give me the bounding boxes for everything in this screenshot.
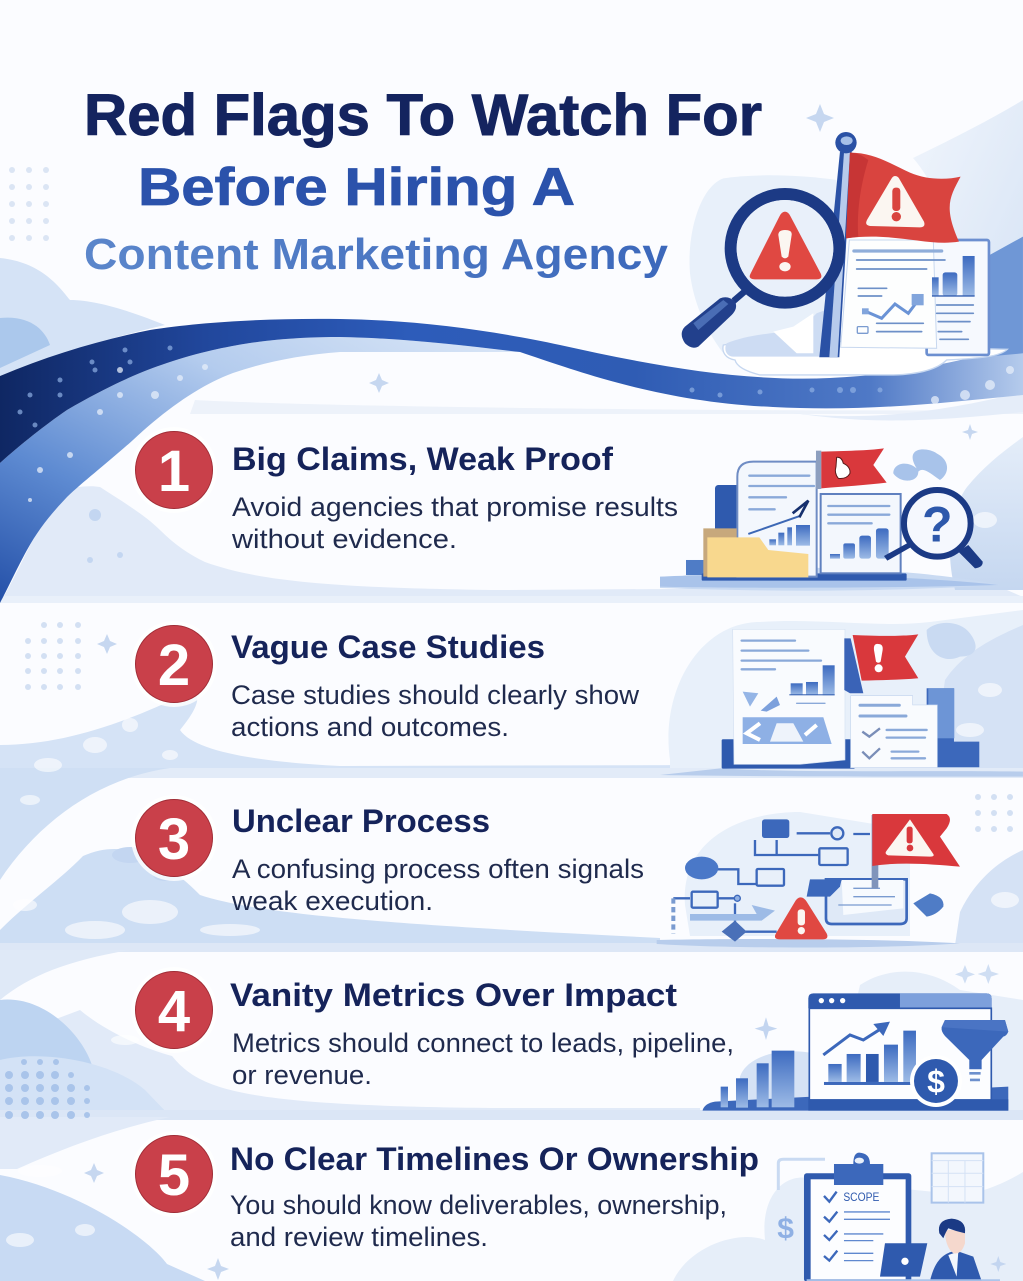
item 2	[131, 621, 1023, 777]
heading 5: No Clear Timelines Or Ownership	[230, 1141, 759, 1177]
decorative wave band	[0, 319, 1023, 603]
heading 4: Vanity Metrics Over Impact	[230, 977, 677, 1013]
body 2	[231, 680, 640, 742]
body 5: and review timelines.	[230, 1222, 488, 1252]
body 1	[231, 492, 678, 554]
body 3	[231, 854, 644, 916]
illustration 5: scope clipboard, calendar and person	[777, 1153, 1006, 1281]
illustration 4: browser chart, funnel and dollar coin: $	[927, 1063, 945, 1099]
badge 2	[131, 621, 217, 707]
body 5	[230, 1190, 727, 1252]
body 3: A confusing process often signals	[232, 854, 644, 884]
heading 1: Big Claims, Weak Proof	[232, 441, 613, 477]
body 1: without evidence.	[231, 524, 457, 554]
row hills	[0, 486, 1023, 603]
body 4	[232, 1028, 734, 1090]
badge 1: 1	[158, 439, 190, 504]
illustration 1: folder, documents, flag, question magnifier	[660, 448, 998, 588]
heading 2: Vague Case Studies	[231, 629, 545, 665]
title: Content Marketing Agency	[84, 230, 669, 279]
illustration 1: folder, documents, flag, question magnifier: ?	[922, 497, 953, 553]
item 1	[131, 427, 998, 588]
illustration 5: scope clipboard, calendar and person: $	[777, 1212, 794, 1245]
badge 5	[131, 1131, 217, 1217]
badge 2: 2	[158, 633, 190, 698]
badge 3: 3	[158, 807, 190, 872]
item 4	[131, 964, 1008, 1111]
item 3	[131, 795, 960, 948]
faint line under wave	[190, 400, 1023, 414]
body 4: or revenue.	[232, 1060, 372, 1090]
body 1: Avoid agencies that promise results	[232, 492, 678, 522]
badge 5: 5	[158, 1143, 190, 1208]
illustration 2: case study papers and flag	[660, 623, 1023, 777]
illustration 4: browser chart, funnel and dollar coin	[703, 964, 1008, 1111]
body 5: You should know deliverables, ownership,	[230, 1190, 727, 1220]
title: Red Flags To Watch For	[84, 83, 762, 148]
badge 3	[131, 795, 217, 881]
body 2: actions and outcomes.	[231, 712, 509, 742]
body 3: weak execution.	[231, 886, 433, 916]
badge 4: 4	[158, 979, 190, 1044]
badge 4	[131, 967, 217, 1053]
body 4: Metrics should connect to leads, pipeline,	[232, 1028, 734, 1058]
illustration 5: scope clipboard, calendar and person: SCOPE	[843, 1190, 879, 1204]
illustration 3: flowchart, warning and flag	[657, 814, 960, 948]
item 5	[131, 1131, 1006, 1281]
title: Before Hiring A	[138, 158, 575, 217]
badge 1	[131, 427, 217, 513]
body 2: Case studies should clearly show	[231, 680, 640, 710]
hero illustration: flag, magnifier and report	[682, 132, 1023, 375]
heading 3: Unclear Process	[232, 803, 490, 839]
title	[84, 83, 762, 279]
